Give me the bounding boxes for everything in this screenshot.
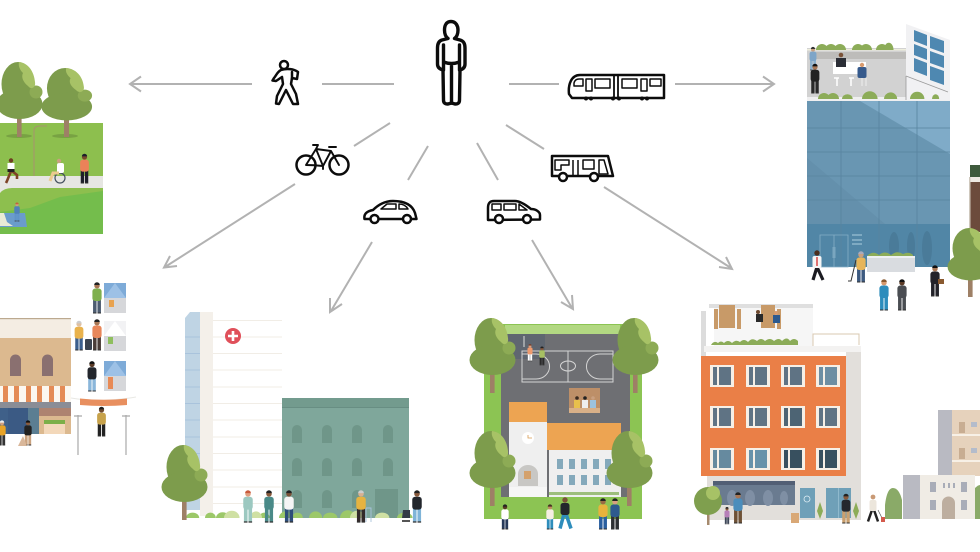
grounds [484, 324, 642, 519]
shadow bands [807, 158, 885, 224]
student white shirt [501, 504, 509, 529]
trees [470, 318, 658, 506]
door one [800, 488, 815, 518]
house grey [903, 475, 920, 519]
icon: central person [438, 22, 465, 104]
arrow: to apartment via bus [506, 125, 732, 269]
tree right [41, 68, 92, 137]
panel: apartment building [694, 304, 885, 525]
tree: right edge [948, 228, 980, 297]
picnic person white [0, 213, 13, 226]
planter [867, 252, 915, 272]
facade windows [710, 365, 840, 470]
fence [505, 325, 620, 334]
tree [162, 445, 208, 520]
icon: car [364, 201, 416, 223]
shopper yellow [0, 420, 6, 445]
elderly person with walker [356, 490, 371, 522]
building [0, 319, 71, 339]
right shrub [975, 485, 980, 519]
child with backpack [546, 504, 554, 529]
bleacher [569, 388, 600, 413]
clock tower [509, 402, 547, 497]
main roof [547, 423, 621, 450]
banner [71, 397, 136, 406]
tall building windows [959, 422, 977, 459]
glass facade [807, 101, 950, 224]
roof person blue [810, 47, 816, 70]
player two [539, 347, 545, 365]
grid lines [807, 101, 950, 267]
vendor green [92, 282, 102, 313]
shop window [713, 481, 795, 506]
hedge [186, 510, 413, 518]
tree shadow right [52, 134, 78, 138]
shopper woman [97, 407, 106, 436]
planters [817, 502, 859, 519]
arrow: to school via van [477, 143, 573, 309]
awning [0, 386, 71, 403]
walking man [812, 250, 823, 280]
green shrub [885, 488, 902, 519]
roof bushes [816, 43, 939, 99]
stall 2 [104, 321, 126, 351]
base [807, 224, 950, 267]
customer black [88, 361, 96, 391]
standing person orange [80, 154, 89, 183]
panel: far right building [969, 165, 980, 232]
side column [846, 352, 861, 520]
roof person black [811, 64, 819, 93]
door two [826, 488, 851, 518]
school wing [549, 450, 621, 497]
person with stroller [402, 490, 422, 522]
man in green scrubs [264, 490, 274, 522]
arrow: to office via train [509, 76, 774, 92]
roof terrace [714, 304, 813, 346]
light reflection [860, 101, 950, 154]
basketball court [522, 351, 613, 382]
panel: office building [807, 24, 950, 310]
path [0, 176, 103, 193]
doors [820, 235, 862, 267]
old shopper [75, 321, 92, 350]
tower cream side [200, 312, 213, 516]
seated person dark [836, 53, 846, 67]
red cross [225, 328, 241, 344]
parent [560, 497, 571, 528]
player one [527, 344, 533, 361]
table and stools [833, 62, 866, 86]
icon: train [569, 75, 664, 100]
vendor apron [92, 319, 102, 350]
school windows [557, 459, 611, 485]
icon: bicycle [296, 145, 348, 174]
panel: school [470, 318, 658, 529]
tree left [0, 62, 42, 137]
asphalt [501, 334, 630, 497]
seated person blue [858, 63, 866, 78]
floor bands [952, 434, 980, 462]
man in blue suit [879, 279, 889, 310]
stall 3 [104, 361, 126, 391]
vendor with bag [18, 420, 32, 446]
arched windows [10, 354, 53, 376]
shadow figures [889, 231, 932, 265]
parent yellow [598, 498, 608, 529]
teen [610, 498, 620, 529]
bright grass [0, 191, 103, 234]
hoop [523, 336, 525, 347]
picnic person blue [14, 203, 20, 221]
house cream [920, 475, 975, 519]
tree small [694, 486, 722, 525]
house door [942, 497, 955, 519]
arrow: to hospital via car [330, 146, 428, 312]
roof terrace [807, 48, 907, 101]
green building [282, 398, 409, 518]
tower blue side [185, 312, 200, 510]
sandwich board [791, 513, 799, 523]
nurse [243, 490, 253, 522]
street lamp [34, 126, 47, 176]
solar frame [906, 24, 950, 100]
panel: old town buildings [885, 410, 980, 519]
orange facade [701, 356, 846, 476]
arrow: to market via bicycle [164, 123, 390, 268]
panel: market street [0, 282, 136, 455]
terrace hedge [711, 338, 798, 345]
storefront [0, 408, 28, 434]
man in grey suit [897, 279, 907, 310]
lawn [0, 123, 103, 234]
panel: park [0, 62, 103, 234]
runner [6, 158, 17, 183]
school hedge [549, 492, 619, 495]
icon: van [488, 201, 540, 223]
icon: pedestrian [272, 61, 298, 104]
building windows [292, 425, 398, 518]
steps [509, 487, 547, 497]
street poles [74, 415, 130, 455]
woman with suitcase [868, 495, 885, 522]
solar panels [914, 30, 944, 85]
arrow: to park via walking [130, 76, 394, 92]
doctor [284, 490, 294, 522]
floor lines [213, 320, 282, 504]
adult with child [724, 492, 743, 524]
terrace rail [813, 334, 859, 346]
house windows [930, 482, 967, 510]
terrace furniture [714, 305, 781, 329]
tall building grey [938, 410, 952, 476]
stall 1 [104, 283, 126, 313]
tall building tan [952, 410, 980, 476]
cleaner [848, 251, 866, 282]
man with briefcase [930, 265, 944, 296]
person on phone [842, 494, 850, 523]
panel: hospital [162, 312, 422, 522]
diners [756, 310, 780, 323]
wheelchair user [50, 159, 65, 183]
produce stall [44, 420, 65, 434]
tree shadow [6, 134, 32, 138]
ground floor [707, 476, 861, 520]
picnic blanket [0, 213, 27, 227]
icon: bus [552, 156, 613, 181]
